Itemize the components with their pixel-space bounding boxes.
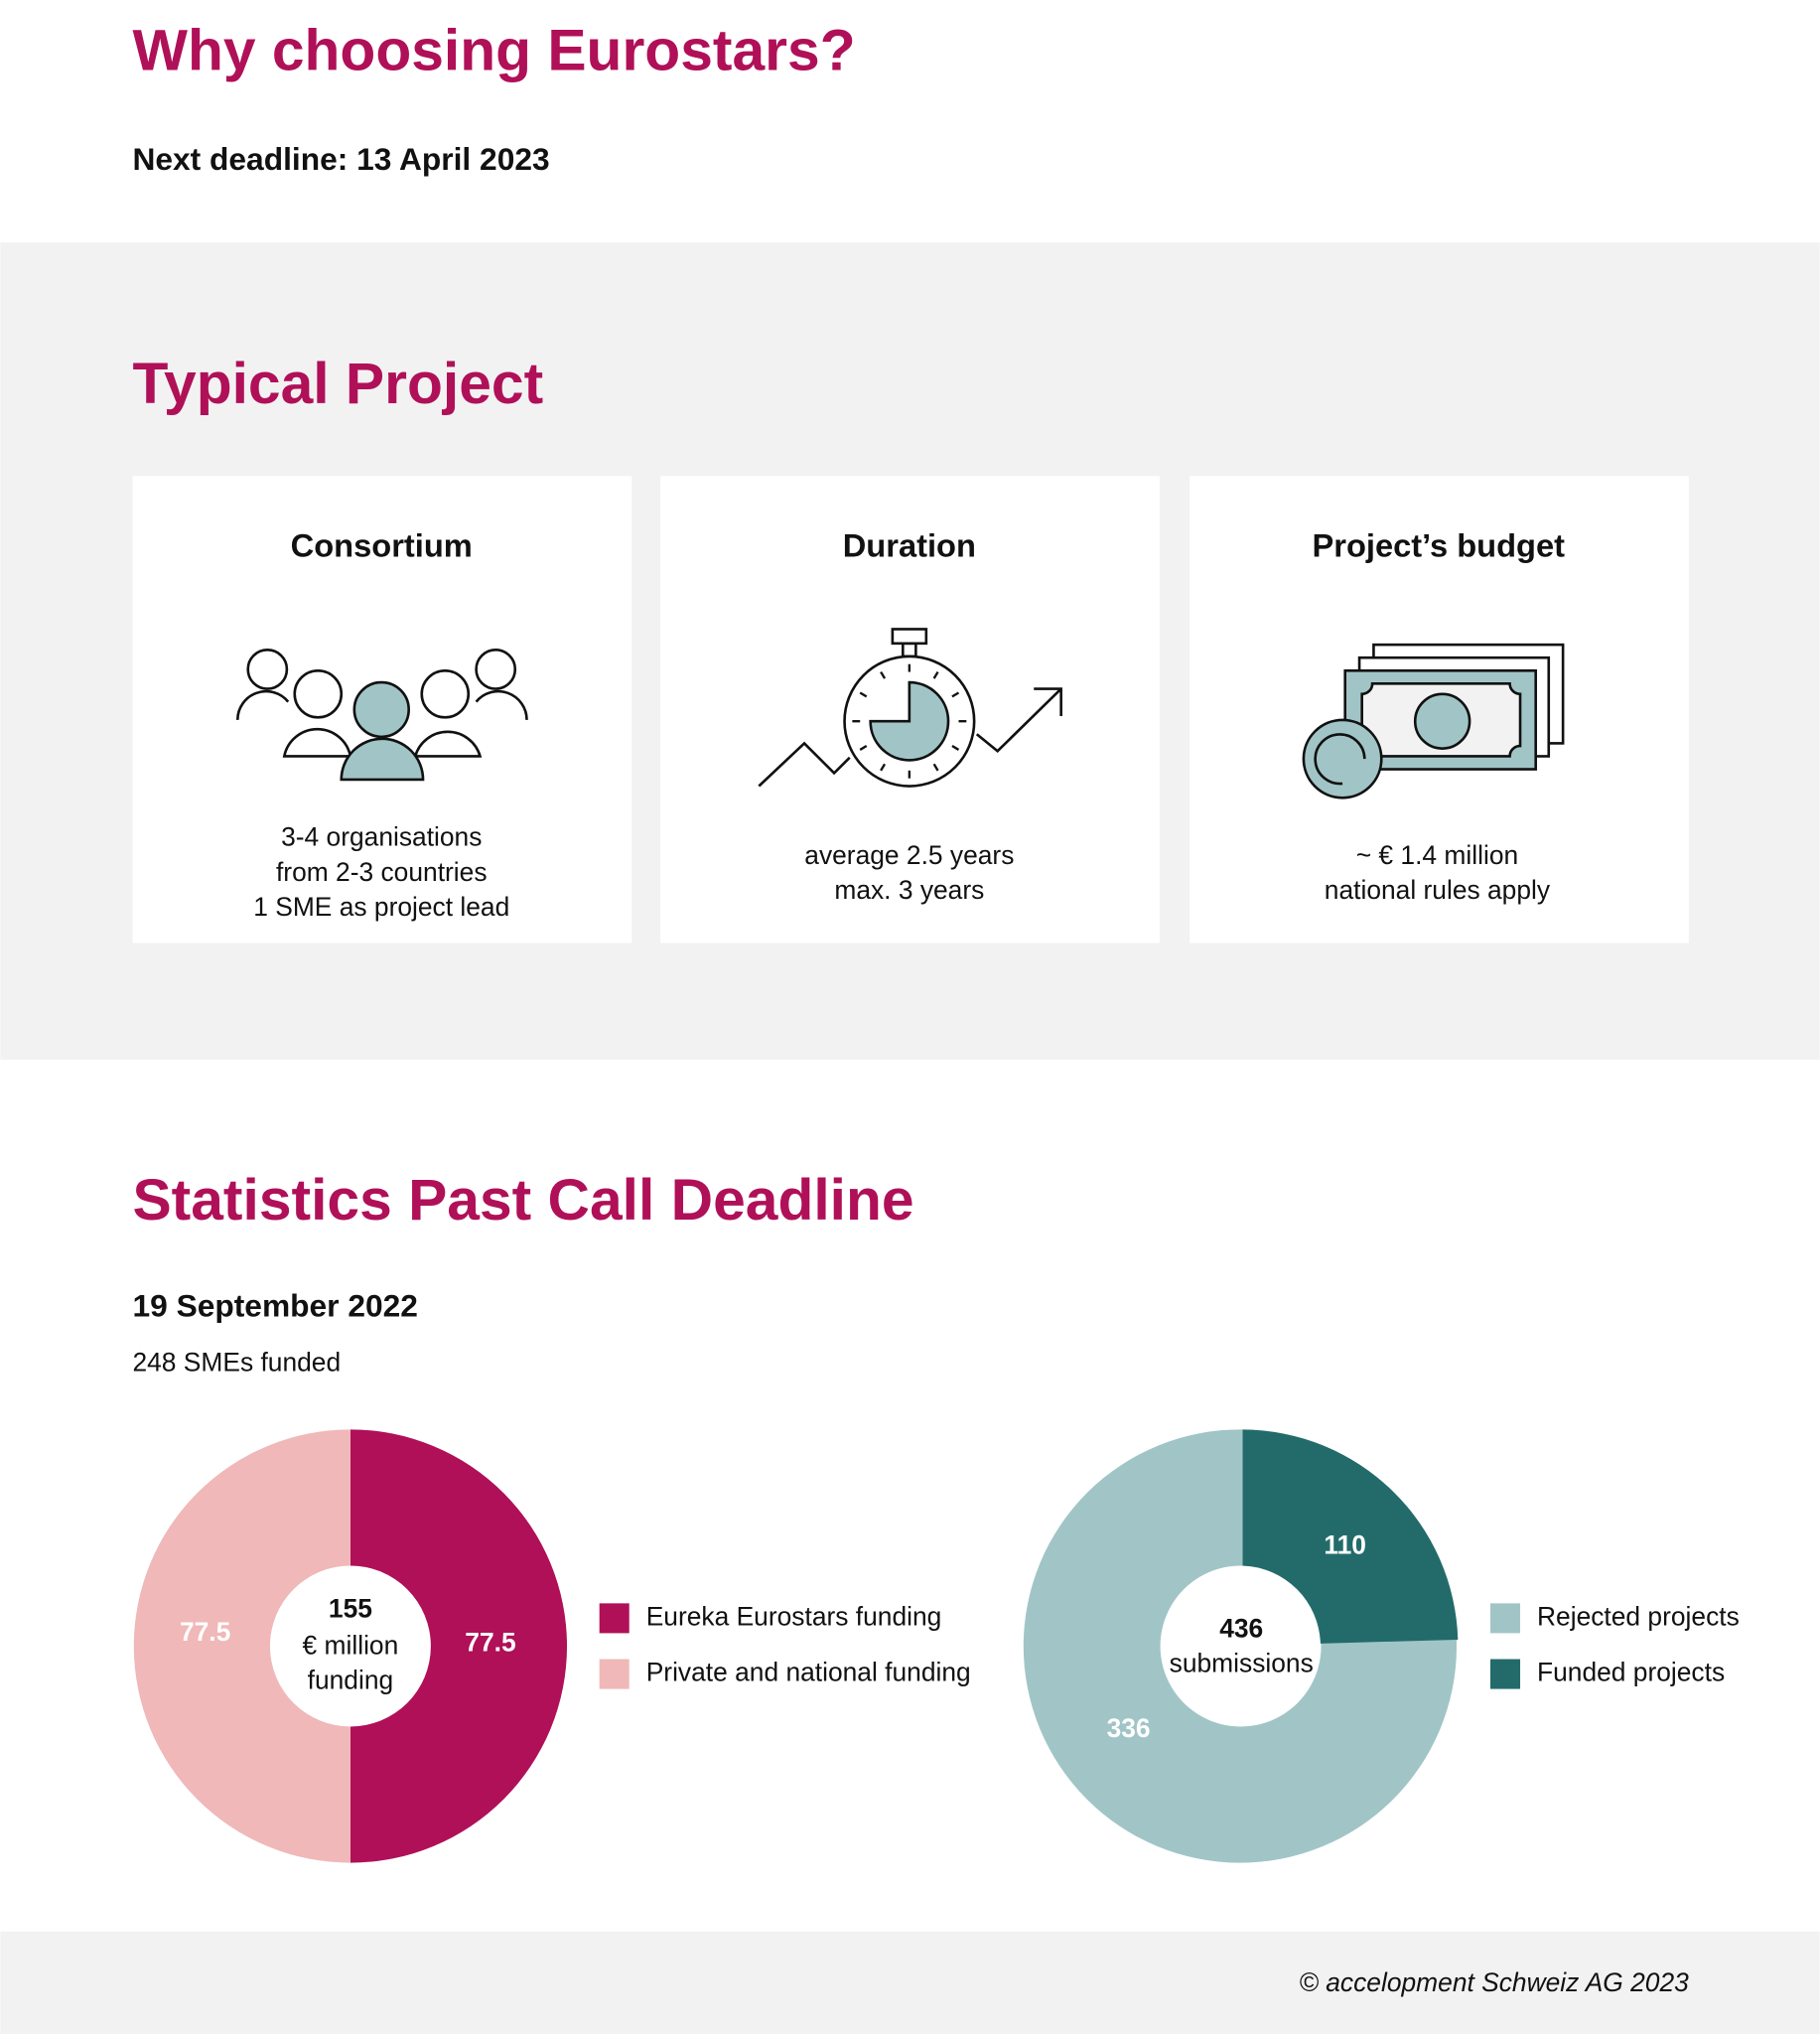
chart: submissions donut: 110 — [1324, 1530, 1366, 1560]
icon: people — [237, 650, 527, 780]
chart: funding donut: 155 — [329, 1594, 372, 1624]
icon: money — [1304, 645, 1563, 798]
card: consortium — [132, 476, 631, 944]
next deadline: Next deadline: 13 April 2023 — [132, 141, 550, 177]
card: budget — [1190, 476, 1689, 944]
chart: funding donut: 77.5 — [465, 1628, 516, 1658]
card text: consortium: 1 SME as project lead — [253, 892, 509, 922]
legend: funding: Private and national funding — [646, 1658, 971, 1687]
legend: submissions: Funded projects — [1537, 1658, 1725, 1687]
card text: budget: ~ € 1.4 million — [1356, 840, 1518, 870]
chart: funding donut: 77.5 — [180, 1617, 230, 1647]
panel: typical project band — [0, 242, 1820, 1060]
card title: budget: Project’s budget — [1312, 526, 1565, 563]
footer — [0, 1932, 1820, 2034]
chart: funding donut — [134, 1429, 567, 1863]
heading: typical project: Typical Project — [132, 352, 543, 416]
card title: duration: Duration — [843, 526, 976, 563]
subheading: date: 19 September 2022 — [132, 1288, 418, 1324]
card title: consortium: Consortium — [291, 526, 473, 563]
legend: submissions — [1490, 1602, 1740, 1689]
footer: © accelopment Schweiz AG 2023 — [1300, 1967, 1689, 1997]
icon: stopwatch with trend — [759, 629, 1061, 787]
card text: consortium: from 2-3 countries — [276, 857, 488, 887]
text: SMEs funded: 248 SMEs funded — [132, 1348, 341, 1378]
legend: funding: Eureka Eurostars funding — [646, 1602, 941, 1632]
legend: funding — [600, 1602, 971, 1689]
card text: duration: average 2.5 years — [804, 840, 1014, 870]
heading: statistics: Statistics Past Call Deadline — [132, 1168, 914, 1233]
card text: budget: national rules apply — [1325, 875, 1551, 905]
chart: submissions donut: 336 — [1107, 1713, 1151, 1743]
card: duration — [660, 476, 1160, 944]
title: Why choosing Eurostars? — [132, 19, 856, 83]
chart: submissions donut: 436 — [1219, 1613, 1263, 1643]
legend: submissions: Rejected projects — [1537, 1602, 1740, 1632]
card text: duration: max. 3 years — [834, 875, 984, 905]
card text: consortium: 3-4 organisations — [281, 822, 482, 852]
chart: funding donut: € million — [303, 1630, 398, 1660]
chart: funding donut: funding — [308, 1666, 393, 1695]
chart: submissions donut — [1024, 1429, 1458, 1863]
chart: submissions donut: submissions — [1170, 1649, 1314, 1678]
